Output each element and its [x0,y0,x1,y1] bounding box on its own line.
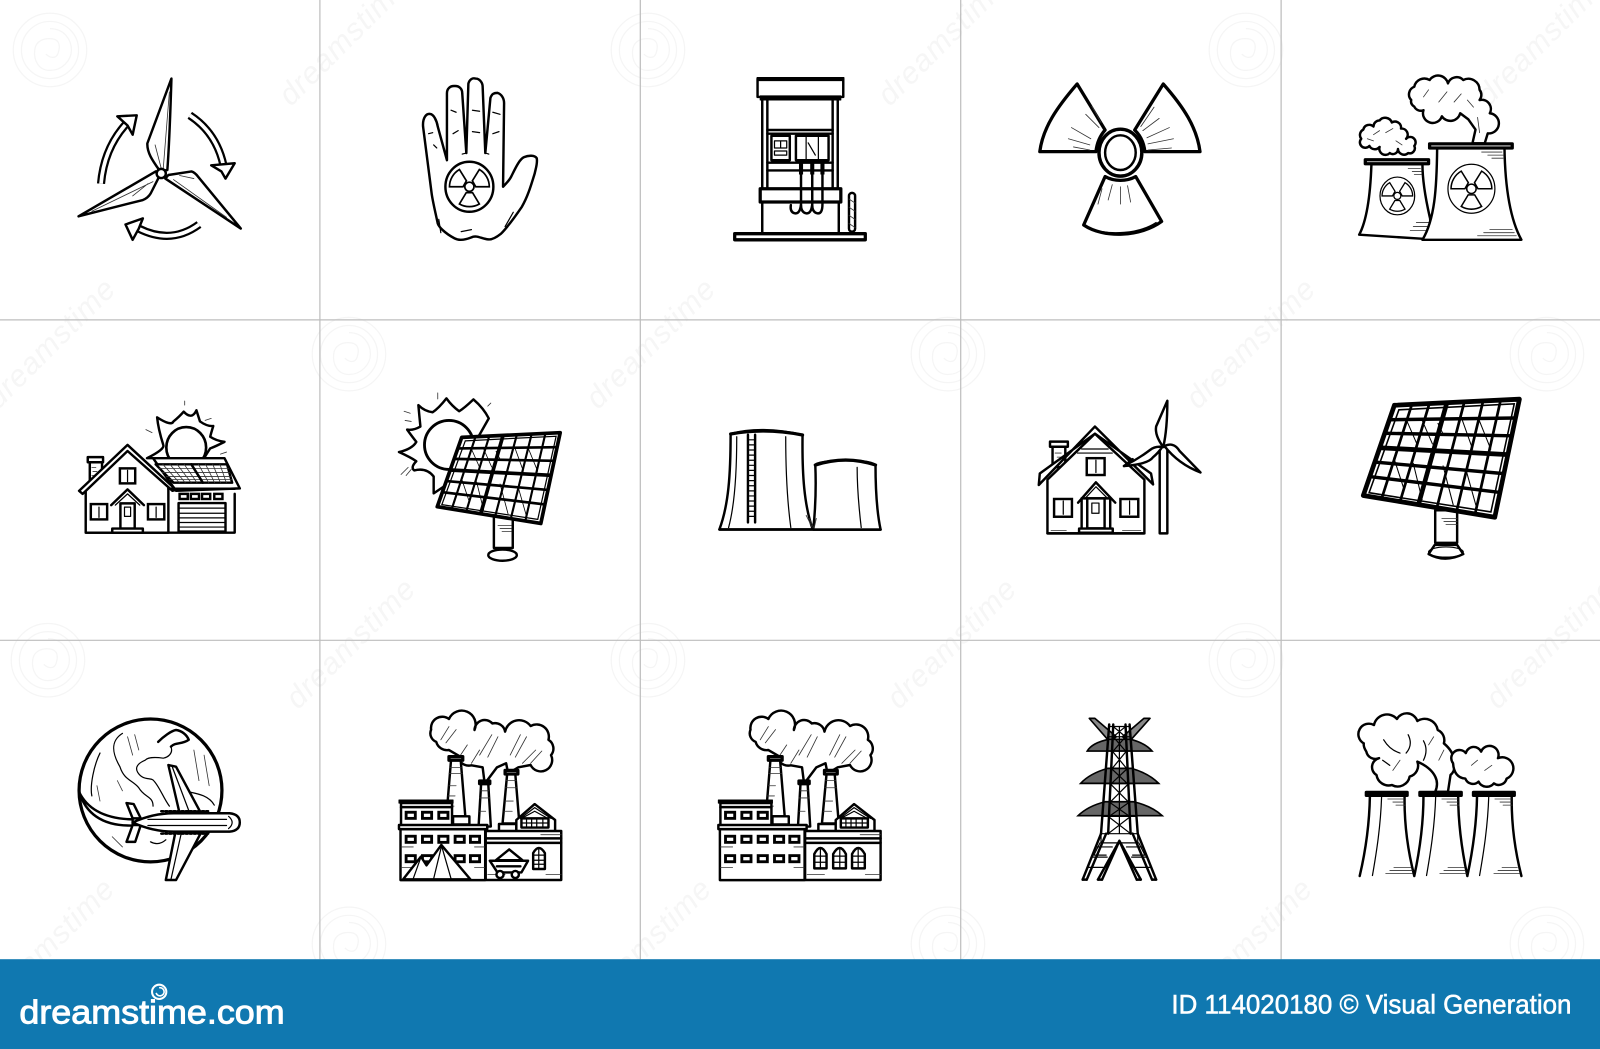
icon: electricity pylon [1078,718,1162,880]
icon: three cooling towers with smoke [1358,713,1521,876]
icon: stop hand with radiation sign [423,78,537,240]
watermarks: dreamstime [880,572,1023,715]
watermarks: dreamstime [1176,872,1319,1015]
icon: radiation symbol [1040,84,1200,234]
icon: large solar panel [1363,399,1519,559]
icon: coal power plant [399,711,561,880]
icon: cooling towers [719,430,881,530]
icon: fuel pump [735,78,865,240]
icon: factory with smoke stacks [718,711,881,880]
icon: nuclear cooling towers with smoke [1359,76,1521,240]
watermarks: dreamstime [575,872,718,1015]
icon: globe with airplane [79,719,240,880]
footer logo: dreamstime.com [19,994,285,1031]
watermarks: dreamstime [579,272,722,415]
icon: house with solar roof [79,401,240,533]
watermarks: dreamstime [1179,272,1322,415]
footer bar [0,959,1600,1049]
icon: house with wind turbine [1039,401,1201,533]
watermarks: dreamstime [279,572,422,715]
credit text: ID 114020180 © Visual Generation [1171,989,1571,1019]
icon: wind turbine with arrows [79,79,241,240]
icon: sun and solar panel [399,393,560,561]
